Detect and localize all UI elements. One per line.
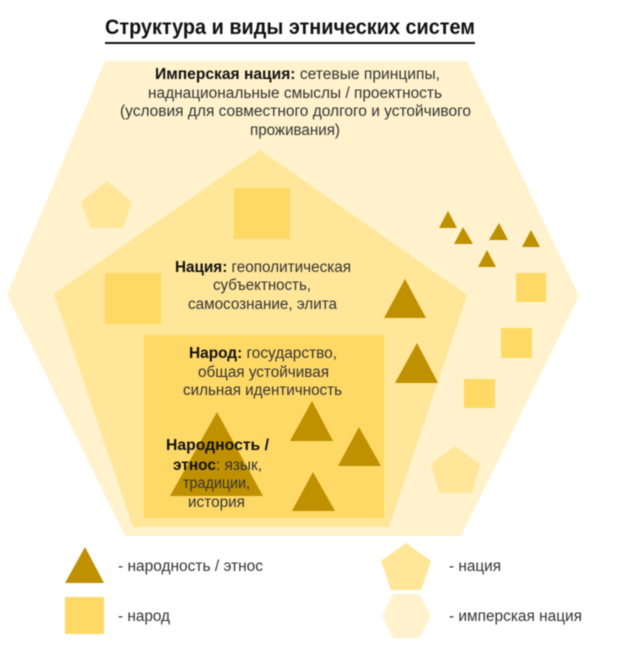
legend: people — [65, 597, 170, 634]
text: people: сильная идентичность — [183, 382, 342, 399]
legend: imperial nation: - имперская нация — [449, 608, 582, 625]
title: Структура и виды этнических систем — [105, 16, 475, 39]
text: imperial nation: (условия для совместного долгого и устойчивого — [120, 103, 471, 120]
text: nation — [175, 259, 351, 313]
text: people — [183, 345, 342, 399]
text: ethnos — [166, 437, 270, 511]
text: people: Народ: государство, — [189, 345, 337, 362]
text: imperial nation — [120, 66, 471, 139]
nation triangles — [384, 279, 438, 383]
pentagons in imperial nation — [81, 181, 480, 493]
legend: imperial nation — [382, 594, 582, 638]
text: imperial nation: проживания) — [250, 122, 340, 139]
squares in imperial nation — [464, 273, 546, 408]
legend: nation — [381, 543, 501, 590]
small triangles in imperial nation — [439, 211, 540, 267]
text: nation: Нация: геополитическая — [175, 259, 351, 276]
text: nation: субъектность, — [213, 277, 311, 294]
panel: people square — [144, 335, 384, 518]
legend: nation: - нация — [449, 558, 501, 575]
text: ethnos: традиции, — [183, 475, 250, 492]
legend: people: - народ — [118, 608, 170, 625]
text: people: общая устойчивая — [198, 364, 329, 381]
text: nation: самосознание, элита — [188, 296, 337, 313]
people triangles — [290, 401, 381, 511]
squares in nation — [105, 188, 290, 324]
icon: large ethnos triangle — [170, 412, 263, 496]
panel: imperial nation hexagon — [7, 61, 579, 536]
text: ethnos: этнос: язык, — [173, 457, 262, 474]
legend: ethnos — [65, 547, 263, 583]
panel: nation pentagon — [54, 150, 467, 527]
text: imperial nation: Имперская нация: сетевые принципы, — [155, 66, 440, 83]
text: ethnos: история — [188, 494, 245, 511]
legend: ethnos: - народность / этнос — [118, 558, 263, 575]
text: imperial nation: наднациональные смыслы / проектность — [148, 85, 442, 102]
text: ethnos: Народность / — [166, 437, 270, 454]
